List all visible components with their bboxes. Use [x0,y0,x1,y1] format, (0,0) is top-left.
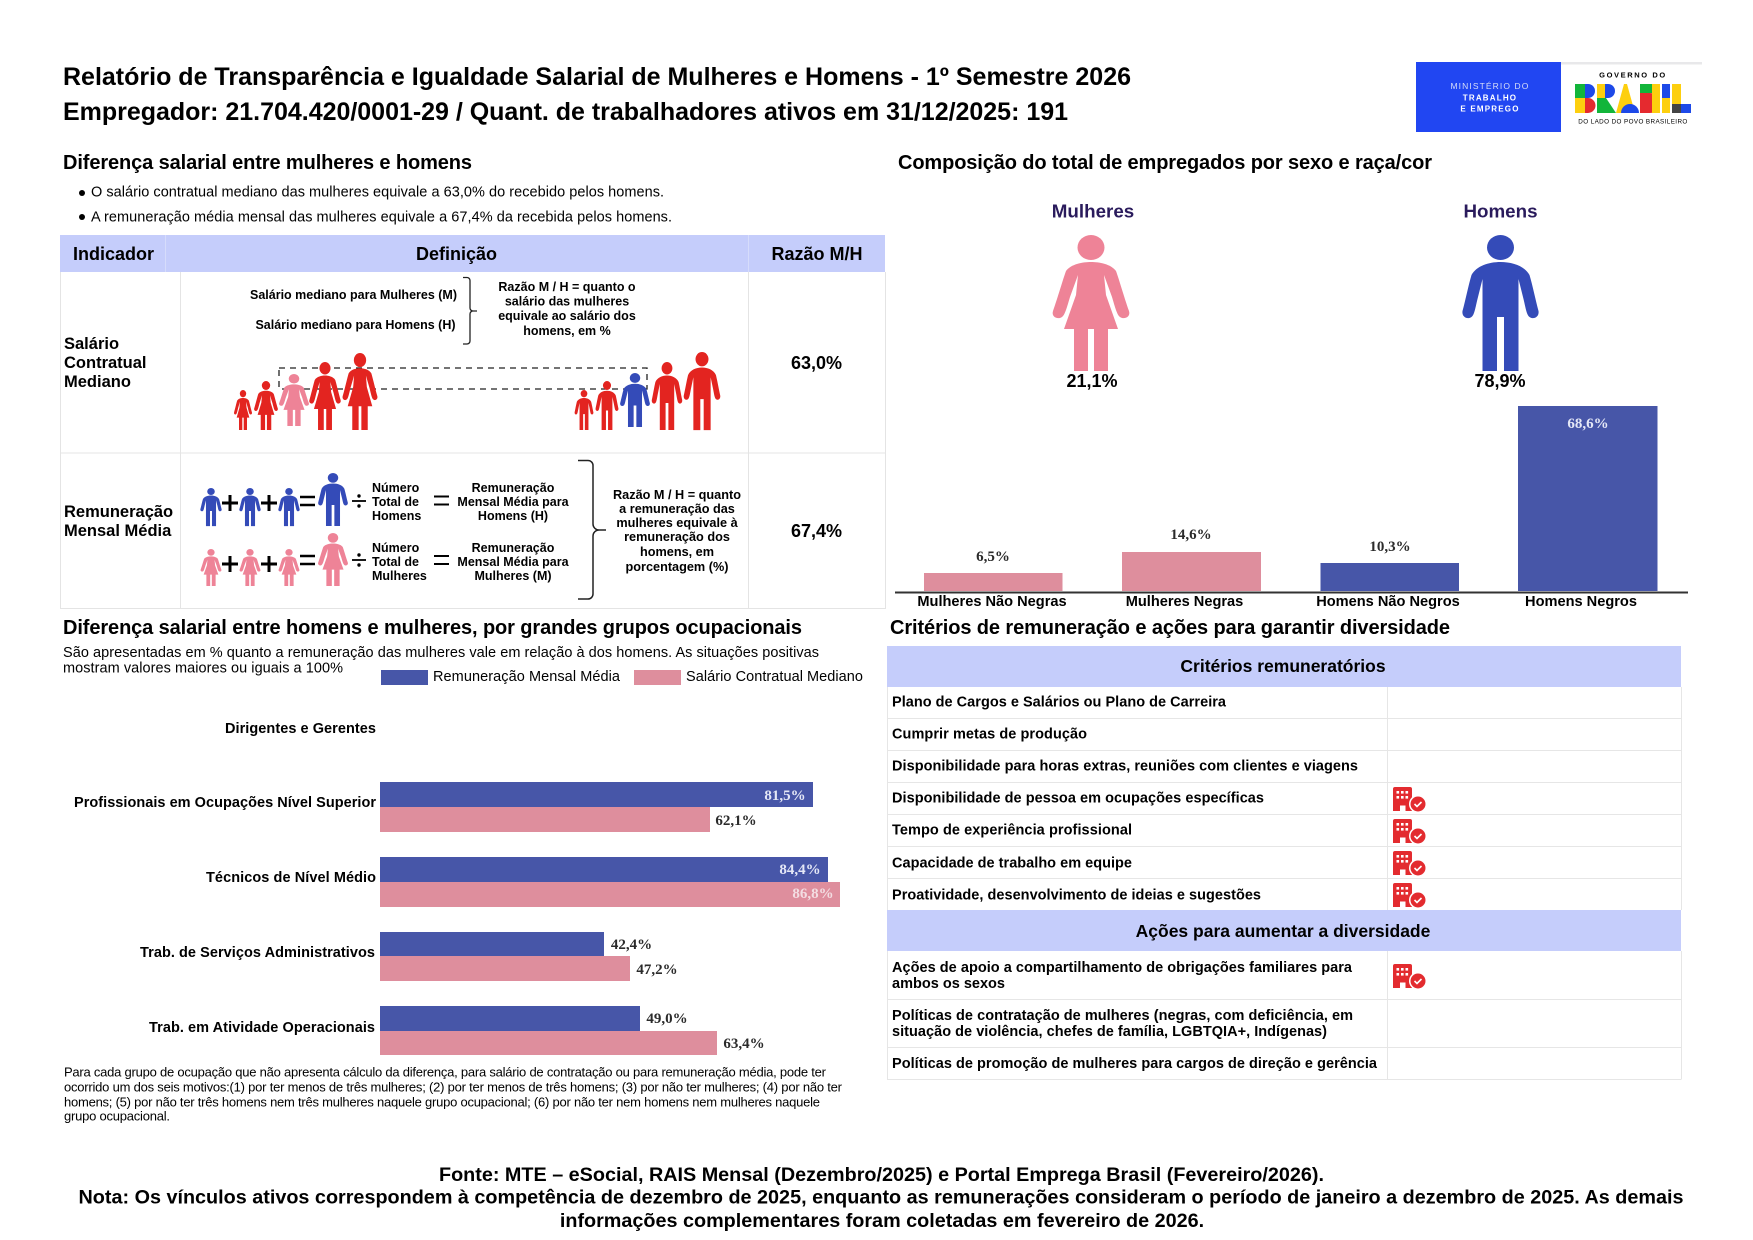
definition text: salário mediano: Salário mediano para Mulheres (M) [250,288,457,302]
bar chart: grupos ocupacionais: 86,8% [792,886,834,902]
heading: composição: Composição do total de empregados por sexo e raça/cor [898,152,1432,174]
table header: ações: Ações para aumentar a diversidade [1136,921,1431,941]
criteria rows [892,694,1358,904]
brace [578,460,606,599]
homens figure: 78,9% [1474,371,1526,391]
logo: ministério e governo do Brasil: E EMPREGO [1460,104,1520,114]
bar chart: grupos ocupacionais: Dirigentes e Gerentes [225,721,376,737]
definition text: razão remuneração: homens, em [640,545,714,559]
action rows: ambos os sexos [892,976,1005,992]
footer: fonte e nota [78,1164,1684,1232]
mulheres figure: Mulheres [1052,200,1134,222]
action rows [892,960,1378,1072]
logo: ministério e governo do Brasil: MINISTÉRIO DO [1450,81,1530,91]
icon: women figures [234,353,377,430]
criteria rows: Tempo de experiência profissional [892,822,1132,838]
table: indicadores [60,235,886,608]
row label: remuneração mensal média: Remuneração [64,503,173,521]
table header: Razão M/H [771,244,863,264]
logo: ministério e governo do Brasil: DO LADO DO POVO BRASILEIRO [1578,118,1688,126]
criteria rows: Disponibilidade para horas extras, reuniões com clientes e viagens [892,758,1358,774]
bullet text: A remuneração média mensal das mulheres equivale a 67,4% da recebida pelos homens. [91,210,672,226]
bar chart: composição: 14,6% [1170,527,1212,543]
bar chart: grupos ocupacionais: Profissionais em Ocupações Nível Superior [74,795,376,811]
row label: salário contratual mediano: Mediano [64,373,131,391]
row label: salário contratual mediano: Salário [64,335,119,353]
bar chart: grupos ocupacionais: 63,4% [723,1036,765,1052]
equation: women: Remuneração [472,541,555,555]
definition text: salário mediano: Salário mediano para Homens (H) [255,318,456,332]
heading: grupos ocupacionais: Diferença salarial entre homens e mulheres, por grandes grupos ocupacionais [63,617,802,639]
legend: Salário Contratual Mediano [686,669,863,685]
footnote: grupo ocupacional. [64,1108,170,1124]
row label: salário contratual mediano [64,335,146,391]
bar chart: grupos ocupacionais: 42,4% [611,937,652,953]
footer: fonte e nota: Fonte: MTE – eSocial, RAIS Mensal (Dezembro/2025) e Portal Emprega Brasil (Fevereiro/2026). [439,1164,1324,1186]
table header [73,244,863,264]
section: grupos ocupacionais [63,617,863,1124]
bar chart: grupos ocupacionais: 81,5% [764,788,806,804]
row label: remuneração mensal média [64,503,173,540]
logo: ministério e governo do Brasil: TRABALHO [1463,94,1517,102]
bullet text: O salário contratual mediano das mulheres equivale a 63,0% do recebido pelos homens. [91,184,664,200]
section: critérios [887,617,1682,1080]
icon: men figures [575,352,720,430]
definition text: razão: salário das mulheres [505,294,629,308]
bar chart: composição: 10,3% [1369,539,1411,555]
definition text: razão [498,280,636,338]
bar chart: grupos ocupacionais: Trab. de Serviços Administrativos [140,945,375,961]
footnote [64,1064,843,1124]
bar chart: composição: Mulheres Não Negras [917,594,1067,610]
bar chart: composição: Homens Negros [1525,594,1637,610]
section: diferença salarial [63,152,672,226]
action rows: Ações de apoio a compartilhamento de obrigações familiares para [892,960,1353,976]
subtext [63,645,819,676]
equation: men: Homens (H) [478,509,548,523]
logo: ministério e governo do Brasil [1416,62,1702,132]
subtext: mostram valores maiores ou iguais a 100% [63,660,343,676]
definition text: razão remuneração: a remuneração das [619,502,735,516]
row label: salário contratual mediano: Contratual [64,354,146,372]
subtext: São apresentadas em % quanto a remuneração das mulheres vale em relação à dos homens. As situações positivas [63,645,819,661]
value: 67,4%: 67,4% [791,521,842,541]
dashed comparison box [279,368,647,389]
heading: diferença salarial: Diferença salarial entre mulheres e homens [63,152,472,174]
logo: ministério e governo do Brasil: GOVERNO DO [1599,70,1667,80]
equation: men: Mensal Média para [457,495,570,509]
criteria rows: Proatividade, desenvolvimento de ideias e sugestões [892,888,1261,904]
equation: men: Total de [372,495,419,509]
equation: women: Mensal Média para [457,555,570,569]
footnote: homens; (5) por não ter três homens nem três mulheres naquele grupo ocupacional; (6) por não ter nem homens nem mulheres naquele [64,1094,820,1110]
footer: fonte e nota: informações complementares foram coletadas em fevereiro de 2026. [560,1210,1204,1232]
criteria rows: Disponibilidade de pessoa em ocupações específicas [892,790,1264,806]
bar chart: grupos ocupacionais: 47,2% [636,962,678,978]
equation: men: Homens [372,509,421,523]
brace [463,278,477,344]
heading: critérios: Critérios de remuneração e ações para garantir diversidade [890,617,1450,639]
table header: Indicador [73,244,154,264]
equation: men: Remuneração [472,481,555,495]
definition text: razão: homens, em % [523,324,611,338]
bar chart: composição: 68,6% [1567,416,1609,432]
footnote: Para cada grupo de ocupação que não apresenta cálculo da diferença, para salário de contratação ou para remuneração média, pode ter [64,1064,827,1080]
mulheres figure [1052,200,1134,391]
equation: women: Número [372,541,420,555]
bar chart: composição: Homens Não Negros [1316,594,1460,610]
definition text: razão: Razão M / H = quanto o [498,280,636,294]
bar chart: composição: Mulheres Negras [1126,594,1243,610]
title [63,63,1131,126]
equation: men [200,473,570,526]
mulheres figure: 21,1% [1066,371,1118,391]
criteria rows: Capacidade de trabalho em equipe [892,856,1132,872]
criteria rows: Plano de Cargos e Salários ou Plano de Carreira [892,694,1227,710]
criteria rows: Cumprir metas de produção [892,726,1087,742]
bar chart: grupos ocupacionais: Trab. em Atividade Operacionais [149,1020,375,1036]
bar chart: grupos ocupacionais: 62,1% [715,813,757,829]
row label: remuneração mensal média: Mensal Média [64,522,172,540]
bar chart: composição: 6,5% [976,549,1010,565]
definition text: razão: equivale ao salário dos [498,309,636,323]
definition text: salário mediano [250,288,457,332]
definition text: razão remuneração: Razão M / H = quanto [613,488,741,502]
definition text: razão remuneração: mulheres equivale à [616,516,739,530]
bar chart: grupos ocupacionais [74,721,840,1055]
section: composição [895,152,1688,610]
title: Relatório de Transparência e Igualdade Salarial de Mulheres e Homens - 1º Semestre 2026 [63,63,1131,91]
table: critérios e ações [887,646,1682,1080]
homens figure: Homens [1463,200,1538,222]
table header: critérios remuneratórios: Critérios remuneratórios [1180,656,1386,676]
equation: women: Mulheres [372,569,427,583]
action rows: Políticas de contratação de mulheres (negras, com deficiência, em [892,1008,1353,1024]
action rows: situação de violência, chefes de família, LGBTQIA+, Indígenas) [892,1024,1327,1040]
action rows: Políticas de promoção de mulheres para cargos de direção e gerência [892,1056,1378,1072]
definition text: razão remuneração [613,488,741,574]
bar chart: grupos ocupacionais: 49,0% [646,1011,688,1027]
definition text: razão remuneração: porcentagem (%) [626,560,728,574]
equation: men: Número [372,481,420,495]
definition text: razão remuneração: remuneração dos [624,530,730,544]
bar chart: composição [895,406,1688,610]
equation: women: Total de [372,555,419,569]
legend [381,669,863,685]
value: 63,0%: 63,0% [791,353,842,373]
table header: Definição [416,244,497,264]
legend: Remuneração Mensal Média [433,669,621,685]
footnote: ocorrido um dos seis motivos:(1) por ter menos de três mulheres; (2) por ter menos de três homens; (3) por não ter mulheres; (4) por não ter [64,1080,843,1094]
title: Empregador: 21.704.420/0001-29 / Quant. de trabalhadores ativos em 31/12/2025: 191 [63,98,1068,126]
equation: women: Mulheres (M) [474,569,552,583]
equation: women [201,533,570,586]
bar chart: grupos ocupacionais: Técnicos de Nível Médio [206,870,376,886]
homens figure [1462,200,1539,391]
bar chart: grupos ocupacionais: 84,4% [779,862,821,878]
bullet text [79,184,672,226]
icons: company check [1393,787,1427,990]
footer: fonte e nota: Nota: Os vínculos ativos correspondem à competência de dezembro de 2025, enquanto as remunerações consideram o período de janeiro a dezembro de 2025. As demais [78,1186,1684,1208]
